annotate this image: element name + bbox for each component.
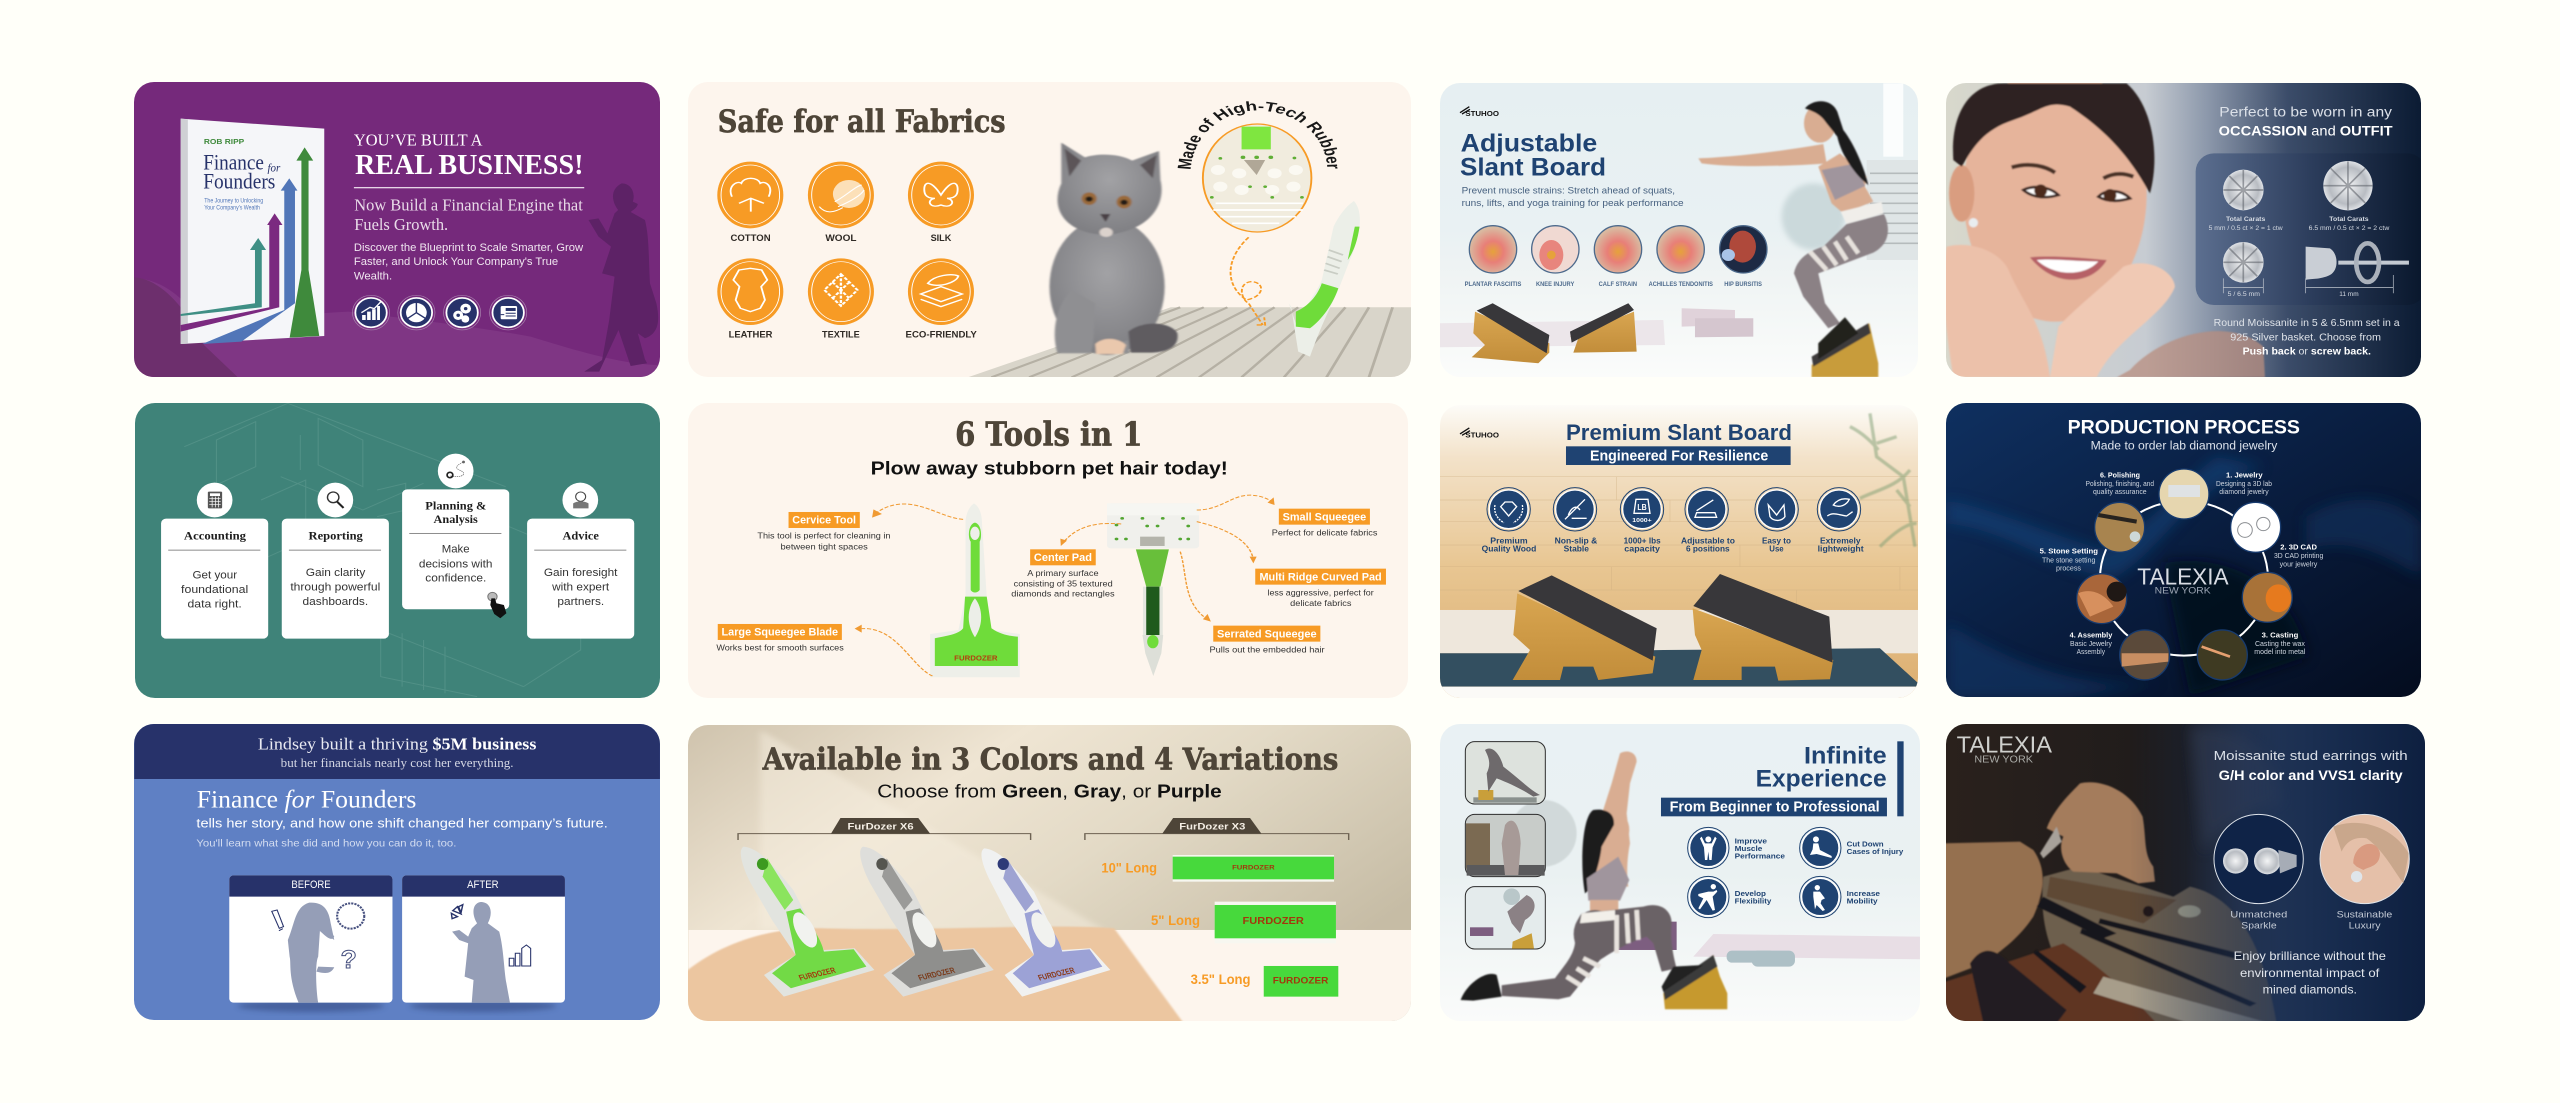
benefit labels: Improve: [1735, 837, 1767, 846]
circle: sustainable luxury: Luxury: [2349, 920, 2381, 930]
bracket: furdozer x3: FurDozer X3: [1179, 822, 1245, 832]
after card: AFTER: [467, 879, 499, 891]
panel: 6 tools in 1: [688, 403, 1408, 698]
photo: smiling woman: [1944, 65, 2265, 377]
benefit labels: Performance: [1735, 851, 1785, 860]
book cover: Founders: [203, 169, 275, 193]
label: cervice tool: [757, 512, 891, 552]
step labels: Casting the wax: [2255, 639, 2305, 648]
subheading: Now Build a Financial Engine that: [354, 195, 583, 215]
sizes panel: 6.5 mm / 0.5 ct × 2 = 2 ctw: [2309, 225, 2389, 232]
brand logo: STUHOO: [1465, 111, 1500, 118]
description: 925 Silver basket. Choose from: [2230, 332, 2381, 343]
before card: ?: [341, 947, 357, 974]
sizes panel: Total Carats: [2226, 216, 2266, 223]
injury labels: CALF STRAIN: [1599, 281, 1637, 288]
step labels: The stone setting: [2042, 555, 2095, 564]
book cover: for: [267, 162, 281, 174]
body text: Wealth.: [354, 271, 392, 282]
carpet: [680, 927, 1185, 1025]
label: large squeegee blade: Large Squeegee Blade: [722, 626, 838, 638]
silhouette: walking woman: [584, 183, 658, 372]
x3 size: 5 inch: [1151, 902, 1336, 943]
panel: moissanite stud earrings: [1940, 723, 2427, 1023]
brand logo: STUHOO: [1465, 433, 1500, 440]
card: reporting: dashboards.: [302, 596, 368, 608]
step labels: [2040, 470, 2323, 656]
tool: squeegee handle: FURDOZER: [954, 654, 998, 662]
card: planning and analysis: [402, 454, 509, 618]
feature labels: Use: [1769, 543, 1784, 553]
label: large squeegee blade: Works best for smooth surfaces: [716, 644, 844, 653]
brand logo: NEW YORK: [1974, 754, 2033, 765]
step labels: process: [2056, 563, 2081, 572]
feature labels: Premium: [1490, 535, 1528, 545]
tool: squeegee handle: [930, 503, 1020, 677]
brand logo: TALEXIA: [1957, 732, 2053, 758]
tool: purple: [981, 848, 1110, 997]
sizes panel: 11 mm: [2339, 291, 2359, 298]
x3 size: 10 inch: [1101, 855, 1334, 882]
injury labels: [1465, 282, 1762, 286]
benefit labels: [1735, 837, 1904, 905]
central logo: TALEXIA: [2137, 564, 2229, 590]
benefit labels: Develop: [1735, 889, 1766, 898]
tool: gray: FURDOZER: [917, 966, 957, 983]
tool: pad head: [1107, 503, 1199, 676]
step labels: 3D CAD printing: [2274, 551, 2323, 560]
step labels: 2. 3D CAD: [2280, 542, 2317, 551]
step labels: Basic Jewelry: [2070, 639, 2112, 648]
bracket: furdozer x6: [738, 818, 1031, 840]
card: reporting: Reporting: [309, 529, 363, 543]
story text: You'll learn what she did and how you can do it, too.: [196, 839, 456, 849]
feature labels: [1482, 535, 1864, 553]
heading: you've built a real business: [354, 131, 584, 188]
card: advice: with expert: [551, 582, 609, 594]
injury labels: KNEE INJURY: [1536, 281, 1575, 288]
feature labels: lightweight: [1818, 543, 1864, 553]
subtitle banner: [1566, 446, 1791, 465]
card: planning and analysis: Analysis: [434, 512, 478, 526]
card: advice: [527, 483, 634, 639]
heading: [2214, 748, 2408, 783]
title: Slant Board: [1460, 154, 1606, 182]
description: runs, lifts, and yoga training for peak performance: [1462, 198, 1684, 208]
card: advice: partners.: [557, 596, 604, 608]
book title: Finance for Founders: [197, 785, 416, 813]
heading: you've built a real business: REAL BUSINESS!: [355, 150, 584, 181]
description: [2214, 318, 2400, 357]
feature labels: Easy to: [1762, 535, 1791, 545]
label: cervice tool: This tool is perfect for cleaning in: [757, 532, 891, 541]
navy overlay on photo: [2130, 723, 2427, 1023]
label: cervice tool: Cervice Tool: [792, 514, 856, 526]
heading: Infinite: [1804, 742, 1887, 769]
subtitle banner: From Beginner to Professional: [1670, 800, 1880, 816]
card: accounting: [161, 483, 268, 639]
yoga blocks: [1682, 308, 1753, 337]
step labels: Polishing, finishing, and: [2086, 479, 2154, 488]
step labels: model into metal: [2254, 647, 2306, 656]
callout arrows: [862, 495, 1274, 676]
tool: green: FURDOZER: [797, 966, 837, 983]
callout: high-tech rubber zoom: Made of High-Tech Rubber: [1178, 101, 1338, 169]
benefit labels: Flexibility: [1735, 896, 1772, 905]
x3 size: 3.5 inch: [1191, 966, 1338, 997]
step images: [2077, 469, 2292, 680]
title: Available in 3 Colors and 4 Variations: [762, 741, 1338, 777]
photo: woman lunging: [1461, 751, 1727, 1009]
card: planning and analysis: Planning &: [425, 499, 486, 512]
title: Adjustable: [1461, 130, 1597, 158]
label: multi ridge curved pad: delicate fabrics: [1290, 599, 1352, 608]
panel: infinite experience: [1440, 724, 1920, 1021]
panel: accounting to advice process: [135, 403, 660, 698]
textile: [808, 258, 874, 325]
panel: safe for all fabrics: [688, 82, 1411, 377]
label: multi ridge curved pad: less aggressive, perfect for: [1268, 589, 1374, 598]
subheading: [354, 198, 583, 230]
card: accounting: Get your: [192, 570, 237, 582]
panel: Finance for Founders real business banner: [134, 82, 660, 377]
photo: woman squatting on board: [1698, 101, 1888, 377]
book cover: Your Company's Wealth: [204, 205, 260, 212]
x3 size: 10 inch: 10" Long: [1101, 860, 1157, 876]
card: reporting: [282, 483, 389, 639]
panel: adjustable slant board: [1440, 83, 1918, 377]
icon: pointer hand: [488, 592, 506, 618]
feature labels: 6 positions: [1686, 543, 1730, 553]
benefit labels: Cases of Injury: [1847, 847, 1904, 856]
process ring: [2100, 501, 2268, 656]
card: reporting: through powerful: [290, 582, 380, 594]
circle: unmatched sparkle: Unmatched: [2230, 910, 2287, 920]
feature icons: LB: [1637, 503, 1647, 512]
injury labels: ACHILLES TENDONITIS: [1649, 281, 1713, 288]
sizes panel: 5 mm / 0.5 ct × 2 = 1 ctw: [2209, 225, 2283, 232]
step labels: Assembly: [2077, 647, 2105, 656]
card: accounting: foundational: [181, 584, 248, 596]
callout: high-tech rubber zoom: [1178, 101, 1338, 233]
brand logo: [1460, 106, 1499, 116]
plant: [1850, 413, 1917, 547]
icon badges: fabrics: [717, 162, 974, 325]
step labels: your jewelry: [2280, 560, 2317, 569]
header band: Lindsey built a thriving $5M business: [258, 734, 536, 753]
panel: Lindsey before and after: [134, 724, 660, 1020]
feature labels: Adjustable to: [1681, 535, 1735, 545]
injury labels: PLANTAR FASCIITIS: [1465, 281, 1521, 288]
leather: [717, 258, 783, 325]
header band: but her financials nearly cost her everything.: [281, 755, 514, 770]
heading: [2219, 104, 2393, 138]
fabric labels: SILK: [931, 234, 952, 243]
circle: sustainable luxury: [2320, 814, 2409, 930]
label: large squeegee blade: [716, 624, 844, 653]
dumbbells: [1727, 951, 1795, 967]
cotton: [717, 162, 783, 228]
label: center pad: Center Pad: [1034, 551, 1092, 563]
subtitle: Plow away stubborn pet hair today!: [871, 458, 1228, 479]
title: [1460, 134, 1604, 176]
tool: green: [741, 847, 874, 997]
heading: Made to order lab diamond jewelry: [2091, 439, 2278, 453]
label: center pad: A primary surface: [1027, 569, 1099, 578]
label: center pad: [1011, 549, 1115, 599]
title: Premium Slant Board: [1566, 420, 1792, 445]
x3 size: 5 inch: 5" Long: [1151, 912, 1200, 928]
panel: moissanite occasion and outfit: [1944, 65, 2426, 377]
photo: gray kitten: [1049, 143, 1178, 355]
icon row: [352, 295, 527, 330]
feature labels: 1000+ lbs: [1624, 535, 1661, 545]
label: serrated squeegee: [1209, 626, 1325, 655]
book cover: [181, 119, 324, 344]
eco-friendly: [908, 258, 974, 325]
x3 size: 5 inch: FURDOZER: [1243, 915, 1304, 926]
step labels: diamond jewelry: [2219, 487, 2269, 496]
body text: [354, 242, 583, 282]
title: Safe for all Fabrics: [718, 103, 1006, 139]
slant board left: [1513, 575, 1657, 680]
label: center pad: consisting of 35 textured: [1014, 580, 1113, 589]
description: [2234, 950, 2386, 997]
step labels: 4. Assembly: [2070, 631, 2113, 640]
brand logo: [1460, 428, 1500, 440]
panel: available in 3 colors and 4 variations: [680, 725, 1411, 1025]
heading: PRODUCTION PROCESS: [2068, 418, 2300, 439]
subheading: Fuels Growth.: [354, 215, 448, 234]
photo: jeweler hands at bench: [1940, 726, 2283, 1023]
x3 size: 3.5 inch: 3.5" Long: [1191, 971, 1251, 987]
feature labels: Non-slip &: [1555, 535, 1597, 545]
central logo: NEW YORK: [2155, 585, 2211, 595]
feature labels: Extremely: [1820, 535, 1861, 545]
rug: [968, 307, 1411, 377]
sizes panel: Total Carats: [2329, 216, 2369, 223]
injury circles: [1469, 226, 1767, 273]
label: small squeegee: Small Squeegee: [1283, 511, 1366, 523]
arrow: dashed pointer to tool: [1231, 237, 1265, 325]
tool: furdozer handle: [1289, 201, 1360, 357]
body text: Discover the Blueprint to Scale Smarter, Grow: [354, 242, 583, 254]
sizes panel: 5 / 6.5 mm: [2228, 291, 2260, 298]
before card: [229, 875, 392, 1012]
step image details: [2078, 485, 2291, 667]
fabric labels: LEATHER: [729, 330, 773, 340]
label: small squeegee: Perfect for delicate fabrics: [1272, 529, 1377, 538]
card: accounting: Accounting: [184, 529, 246, 543]
card: accounting: data right.: [187, 599, 242, 610]
card: advice: Advice: [562, 529, 600, 543]
step labels: Designing a 3D lab: [2216, 479, 2272, 488]
subtitle: Choose from Green, Gray, or Purple: [877, 781, 1222, 802]
benefit labels: Mobility: [1847, 896, 1878, 905]
fabric labels: WOOL: [825, 234, 857, 243]
body text: Faster, and Unlock Your Company's True: [354, 256, 558, 268]
book cover: ROB RIPP: [204, 137, 244, 146]
bracket: furdozer x3: [1085, 818, 1349, 840]
description: Enjoy brilliance without the: [2234, 950, 2386, 963]
description: Round Moissanite in 5 & 6.5mm set in a: [2214, 318, 2400, 329]
feature icons: 1000+: [1632, 518, 1652, 524]
feature labels: Stable: [1564, 543, 1589, 553]
header band: [134, 724, 660, 779]
bracket: furdozer x6: FurDozer X6: [848, 822, 914, 832]
book cover: The Journey to Unlocking: [204, 197, 264, 204]
heading: Experience: [1756, 765, 1887, 792]
injury labels: HIP BURSITIS: [1724, 281, 1762, 288]
book cover: Finance: [203, 150, 264, 174]
card: planning and analysis: decisions with: [419, 559, 492, 570]
after card: [402, 875, 565, 1012]
step labels: quality assurance: [2093, 487, 2147, 496]
feature icons: [1487, 488, 1861, 531]
x3 size: 3.5 inch: FURDOZER: [1273, 976, 1329, 986]
description: [1462, 185, 1684, 208]
heading: you've built a real business: YOU’VE BUILT A: [354, 131, 483, 149]
heading: OCCASSION and OUTFIT: [2219, 122, 2393, 138]
slant board right: [1693, 574, 1833, 681]
card: advice: Gain foresight: [544, 567, 617, 579]
story text: tells her story, and how one shift changed her company’s future.: [196, 815, 608, 831]
label: cervice tool: between tight spaces: [781, 543, 868, 552]
description: Push back or screw back.: [2243, 346, 2371, 357]
step labels: 3. Casting: [2262, 631, 2299, 640]
panel: production process: [1946, 403, 2421, 698]
sizes panel: [2196, 153, 2426, 305]
panel: premium slant board: [1440, 405, 1918, 700]
circle: unmatched sparkle: [2214, 814, 2303, 930]
fabric labels: [729, 234, 977, 340]
feature labels: capacity: [1624, 543, 1660, 553]
step labels: 6. Polishing: [2100, 470, 2140, 479]
step labels: 5. Stone Setting: [2040, 547, 2098, 556]
x3 size: 10 inch: FURDOZER: [1232, 864, 1275, 871]
card: reporting: Gain clarity: [306, 567, 366, 579]
before card: BEFORE: [291, 879, 331, 891]
card: planning and analysis: Make: [442, 544, 470, 556]
fabric labels: TEXTILE: [822, 330, 860, 340]
photo insets: [1465, 742, 1545, 949]
benefit labels: Cut Down: [1847, 840, 1884, 849]
tool: gray: [860, 847, 994, 997]
label: multi ridge curved pad: Multi Ridge Curved Pad: [1259, 571, 1382, 583]
heading: Perfect to be worn in any: [2219, 104, 2392, 119]
circle: unmatched sparkle: Sparkle: [2241, 920, 2277, 930]
label: serrated squeegee: Serrated Squeegee: [1217, 628, 1317, 640]
description: environmental impact of: [2240, 967, 2380, 980]
circle: sustainable luxury: Sustainable: [2337, 910, 2392, 920]
description: Prevent muscle strains: Stretch ahead of squats,: [1462, 185, 1675, 195]
feature labels: Quality Wood: [1482, 543, 1536, 553]
label: serrated squeegee: Pulls out the embedded hair: [1209, 646, 1325, 655]
title: 6 Tools in 1: [955, 415, 1142, 453]
slant board products: [1472, 303, 1637, 363]
heading: Moissanite stud earrings with: [2214, 748, 2408, 763]
label: small squeegee: [1272, 509, 1377, 538]
heading: [1756, 741, 1904, 816]
card: planning and analysis: confidence.: [425, 573, 486, 585]
step labels: 1. Jewelry: [2226, 470, 2263, 479]
heading: G/H color and VVS1 clarity: [2219, 768, 2403, 783]
floor and mat: [1440, 610, 1918, 700]
tool: purple: FURDOZER: [1037, 966, 1077, 983]
benefit icons: [1688, 827, 1841, 918]
label: multi ridge curved pad: [1255, 569, 1386, 608]
wool: [808, 162, 874, 228]
story text: [196, 815, 608, 849]
benefit labels: Increase: [1847, 889, 1880, 898]
silk: [908, 162, 974, 228]
subtitle banner: Engineered For Resilience: [1590, 448, 1768, 464]
heading: [2068, 418, 2300, 453]
benefit labels: Muscle: [1735, 844, 1762, 853]
label: center pad: diamonds and rectangles: [1011, 590, 1115, 599]
fabric labels: ECO-FRIENDLY: [906, 330, 977, 340]
description: mined diamonds.: [2263, 984, 2357, 997]
fabric labels: COTTON: [730, 234, 771, 243]
